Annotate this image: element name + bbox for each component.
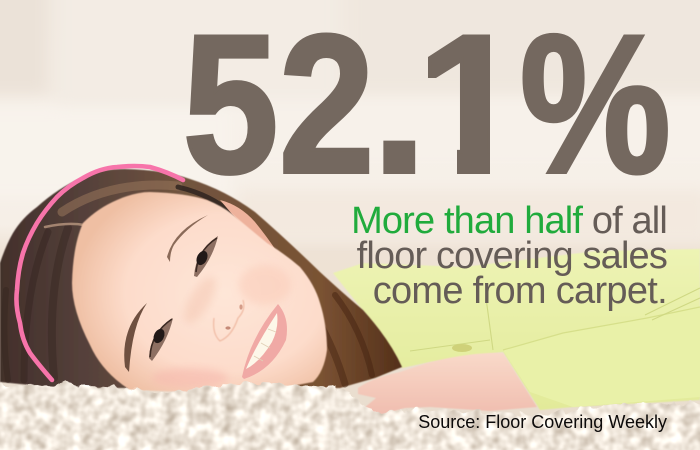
source credit: Source: Floor Covering Weekly (418, 412, 667, 432)
headband (16, 166, 183, 380)
hair strands (4, 185, 372, 384)
cheek shading (152, 368, 228, 388)
percent sign: % (520, 0, 671, 214)
sweater (333, 249, 700, 410)
carpet (0, 382, 700, 450)
digit 2: 2 (279, 0, 374, 215)
digit 5: 5 (183, 0, 278, 215)
nose (214, 300, 244, 341)
decimal point: . (372, 0, 427, 214)
digit 1: 1 (416, 0, 526, 214)
line 2: floor covering sales (357, 235, 667, 277)
lower eye (149, 318, 173, 361)
face (72, 192, 327, 394)
girl (0, 169, 700, 418)
eyebrows (167, 215, 208, 262)
line 1: More than half of all (351, 200, 667, 242)
hand (358, 353, 537, 418)
line 3: come from carpet. (373, 270, 667, 312)
upper eye (194, 236, 218, 277)
headline: 52.1% (186, 32, 668, 176)
ear (220, 200, 277, 252)
statement text (351, 200, 667, 312)
mouth (242, 304, 287, 379)
hair (0, 169, 402, 388)
